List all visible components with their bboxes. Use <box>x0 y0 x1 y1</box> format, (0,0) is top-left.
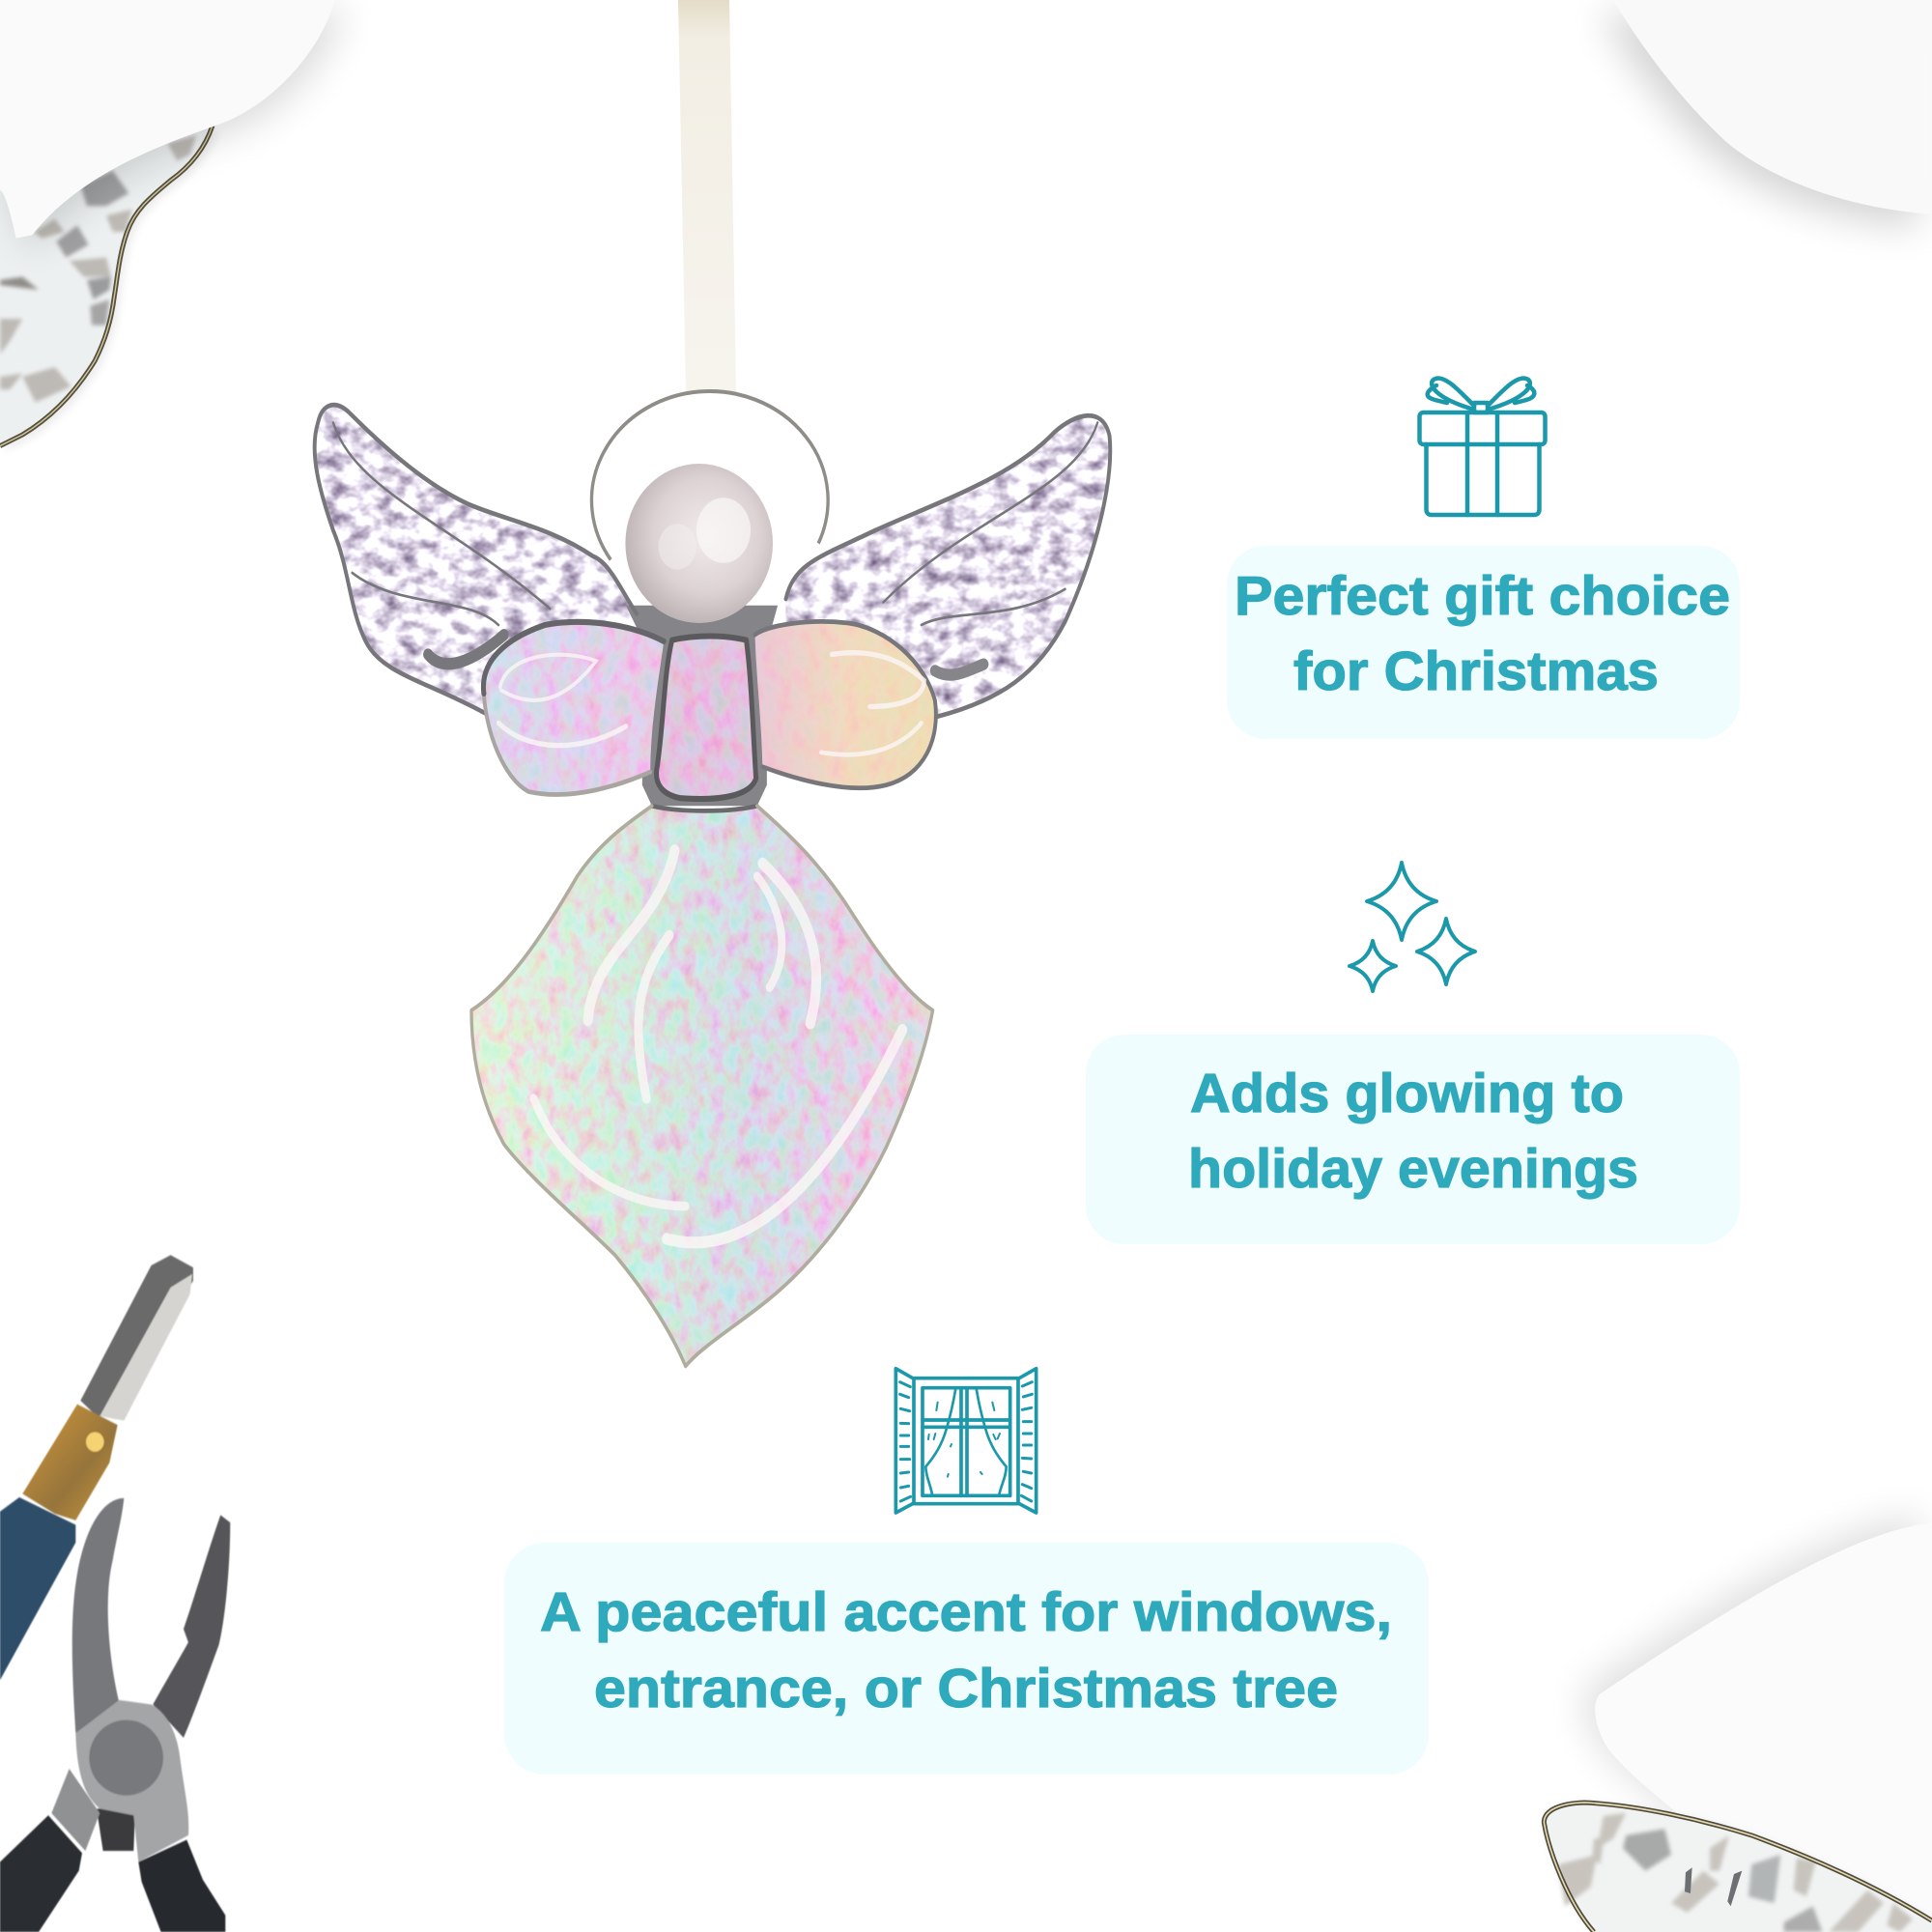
callout text: peaceful accent: A peaceful accent for windows, <box>540 1581 1392 1643</box>
background blob: bottom right with glass piece <box>1544 1515 1932 1932</box>
solder fill behind head and neck <box>626 606 778 806</box>
callout text: peaceful accent <box>540 1581 1392 1719</box>
callout text: perfect gift: for Christmas <box>1293 640 1659 702</box>
icon: sparkles <box>1350 863 1475 991</box>
background blob: top left with glass wing <box>0 0 345 451</box>
centre bow glass <box>659 639 753 796</box>
icon: gift box <box>1420 378 1546 515</box>
satin ribbon <box>678 0 736 392</box>
callout: perfect gift <box>1227 546 1740 739</box>
pliers tool <box>0 1498 230 1932</box>
glass bead head <box>625 464 773 623</box>
left bow glass <box>486 624 664 792</box>
callout text: perfect gift <box>1235 565 1730 702</box>
callout: peaceful accent <box>504 1543 1429 1775</box>
skirt glass <box>469 802 935 1370</box>
callout text: peaceful accent: entrance, or Christmas tree <box>594 1658 1338 1719</box>
glass cutter tool <box>0 1255 193 1680</box>
icon: window with shutters and curtains <box>895 1369 1037 1513</box>
callout text: holiday evenings: holiday evenings <box>1188 1138 1638 1200</box>
callout text: holiday evenings: Adds glowing to <box>1190 1063 1624 1124</box>
painted white strokes <box>498 653 924 1242</box>
right wing <box>786 418 1109 715</box>
background blob: top right <box>1601 0 1932 227</box>
angel ornament <box>306 391 1120 1370</box>
halo wire <box>591 391 828 559</box>
right bow glass <box>755 624 934 786</box>
left wing <box>317 408 636 709</box>
solder lines <box>315 405 1110 1366</box>
callout text: perfect gift: Perfect gift choice <box>1235 565 1730 627</box>
callout text: holiday evenings <box>1188 1063 1638 1200</box>
callout: holiday evenings <box>1086 1035 1740 1244</box>
